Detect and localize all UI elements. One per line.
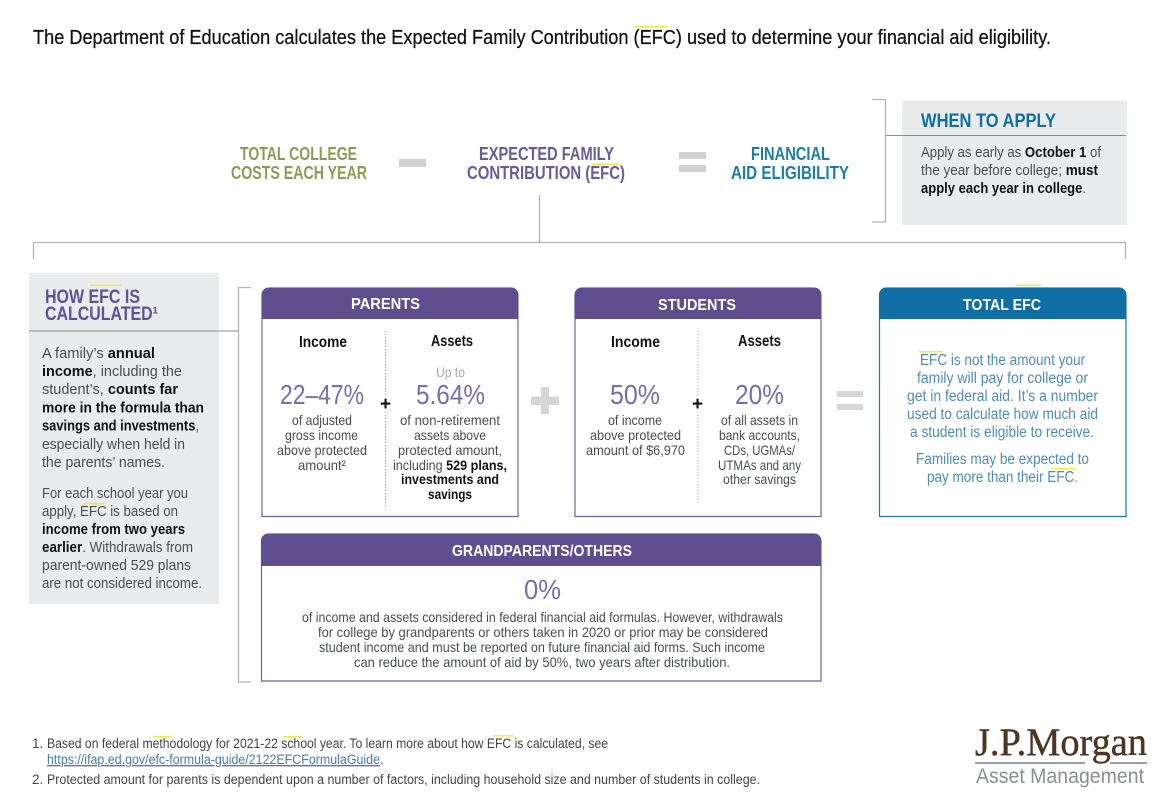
column: students assets: CDs, UGMAs/	[724, 442, 795, 458]
panel: total EFC	[879, 284, 1126, 516]
panel: parents: +	[380, 394, 391, 415]
panel: students: +	[692, 394, 703, 415]
icon: equals sign	[679, 152, 706, 172]
header: grandparents and others: GRANDPARENTS/OTHERS	[452, 543, 632, 560]
heading: how EFC is calculated: CALCULATED¹	[45, 304, 158, 325]
column: parents income	[277, 334, 367, 473]
formula: total college costs: TOTAL COLLEGE	[240, 144, 357, 164]
text: annual income explanation: especially when held in	[42, 436, 185, 453]
text: annual income explanation	[42, 345, 204, 471]
column: parents income: gross income	[285, 427, 358, 443]
formula: financial aid eligibility: AID ELIGIBILITY	[731, 163, 849, 183]
column: students assets: 20%	[735, 379, 784, 410]
text: families may pay more: Families may be expected to	[916, 451, 1089, 468]
formula: expected family contribution: CONTRIBUTION (EFC)	[467, 163, 625, 183]
text: grandparent withdrawal rules: student income and must be reported on future financial aid forms. Such income	[319, 639, 765, 655]
column: parents income: 22–47%	[280, 379, 364, 410]
formula: expected family contribution	[467, 144, 625, 183]
header: total EFC: TOTAL EFC	[963, 297, 1041, 314]
text: grandparent withdrawal rules: for college by grandparents or others taken in 2020 or prior may be considered	[318, 624, 768, 640]
column: parents assets: of non-retirement	[400, 412, 500, 428]
column: students assets: of all assets in	[721, 412, 798, 428]
footnotes: Based on federal methodology for 2021-22 school year. To learn more about how EFC is calculated, see	[47, 736, 608, 751]
column: parents assets: Up to	[436, 364, 465, 380]
column: students income: Income	[611, 334, 660, 351]
stat: zero percent: 0%	[524, 574, 561, 605]
column: parents income: above protected	[277, 442, 367, 458]
text: annual income explanation: more in the formula than	[42, 400, 204, 416]
column: students income	[586, 334, 685, 458]
text: income base year explanation: earlier. Withdrawals from	[42, 539, 193, 556]
text: income base year explanation	[42, 485, 202, 592]
text: income base year explanation: are not considered income.	[42, 575, 202, 592]
text: what EFC means	[907, 351, 1098, 441]
column: parents assets	[393, 333, 507, 502]
icon: plus between income and assets	[691, 396, 704, 412]
column: students income: 50%	[610, 379, 660, 410]
column: parents assets: investments and	[401, 471, 499, 487]
text: what EFC means: used to calculate how much aid	[907, 406, 1098, 423]
column: students assets: other savings	[723, 471, 796, 487]
header: parents: PARENTS	[351, 296, 420, 313]
footnotes: 2.	[32, 772, 43, 787]
text: application timing: Apply as early as October 1 of	[921, 144, 1102, 161]
column: parents assets: assets above	[414, 427, 486, 443]
panel: when to apply	[886, 101, 1127, 225]
text: income base year explanation: apply, EFC is based on	[42, 503, 178, 520]
footnotes: Protected amount for parents is dependent upon a number of factors, including household size and number of students in college.	[47, 772, 760, 787]
text: what EFC means: family will pay for college or	[917, 370, 1088, 387]
formula: expected family contribution: EXPECTED FAMILY	[479, 144, 614, 164]
text: what EFC means: EFC is not the amount your	[920, 352, 1085, 369]
column: parents income: amount²	[298, 457, 346, 473]
column: parents assets: including 529 plans,	[393, 457, 507, 473]
text: income base year explanation: parent-owned 529 plans	[42, 557, 191, 574]
text: annual income explanation: the parents’ names.	[42, 454, 165, 471]
text: grandparent withdrawal rules	[302, 609, 783, 670]
text: grandparent withdrawal rules: can reduce the amount of aid by 50%, two years after distribution.	[354, 654, 730, 670]
logo: J.P. Morgan Asset Management: J.P.Morgan	[975, 721, 1147, 764]
text: what EFC means: get in federal aid. It’s a number	[907, 388, 1098, 405]
column: parents income: Income	[299, 334, 347, 351]
text: what EFC means: a student is eligible to receive.	[910, 424, 1094, 441]
text: income base year explanation: income from two years	[42, 521, 185, 538]
text: annual income explanation: income, including the	[42, 363, 182, 380]
text: annual income explanation: A family’s annual	[42, 345, 155, 362]
text: application timing	[921, 144, 1102, 197]
text: families may pay more	[916, 451, 1089, 486]
column: students assets	[718, 333, 801, 487]
formula: total college costs: COSTS EACH YEAR	[231, 163, 367, 183]
column: parents assets: protected amount,	[398, 442, 502, 458]
panel: students	[574, 288, 821, 516]
panel: grandparents and others	[261, 534, 821, 681]
column: parents income: of adjusted	[292, 412, 352, 428]
icon: plus between income and assets	[379, 396, 392, 412]
text: annual income explanation: savings and investments,	[42, 418, 199, 434]
panel: parents	[262, 288, 518, 516]
icon: large plus	[531, 387, 559, 414]
column: parents assets: Assets	[431, 333, 473, 350]
column: students assets: UTMAs and any	[718, 457, 801, 473]
text: application timing: the year before college; must	[921, 162, 1098, 179]
logo: J.P. Morgan Asset Management	[975, 721, 1147, 788]
column: parents assets: 5.64%	[416, 379, 485, 410]
text: grandparent withdrawal rules: of income and assets considered in federal financial aid formulas. However, withdrawals	[302, 609, 783, 625]
text: income base year explanation: For each school year you	[42, 485, 188, 502]
column: students income: amount of $6,970	[586, 442, 685, 458]
title: The Department of Education calculates the Expected Family Contribution (EFC) used to determine your financial aid eligibility.	[33, 27, 1051, 49]
footnotes: 1.	[32, 736, 43, 751]
heading: how EFC is calculated	[45, 287, 158, 325]
formula: financial aid eligibility	[731, 144, 849, 183]
text: annual income explanation: student’s, counts far	[42, 381, 178, 398]
footnotes	[32, 735, 760, 787]
heading: how EFC is calculated: HOW EFC IS	[45, 287, 140, 308]
column: students income: above protected	[590, 427, 681, 443]
text: families may pay more: pay more than their EFC.	[927, 469, 1078, 486]
formula: total college costs	[231, 144, 367, 183]
footnotes: .	[380, 752, 384, 767]
text: application timing: apply each year in college.	[921, 180, 1086, 197]
column: parents assets: savings	[428, 486, 472, 502]
icon: large equals	[837, 391, 863, 410]
column: students assets: Assets	[738, 333, 781, 350]
panel: how EFC is calculated	[29, 273, 238, 604]
heading: when to apply: WHEN TO APPLY	[921, 111, 1056, 132]
formula: financial aid eligibility: FINANCIAL	[751, 144, 830, 164]
header: students: STUDENTS	[658, 297, 736, 314]
column: students assets: bank accounts,	[719, 427, 800, 443]
footnotes: https://ifap.ed.gov/efc-formula-guide/2122EFCFormulaGuide	[47, 752, 380, 767]
logo: J.P. Morgan Asset Management: Asset Management	[976, 765, 1144, 788]
icon: minus sign	[399, 159, 426, 167]
column: students income: of income	[608, 412, 662, 428]
